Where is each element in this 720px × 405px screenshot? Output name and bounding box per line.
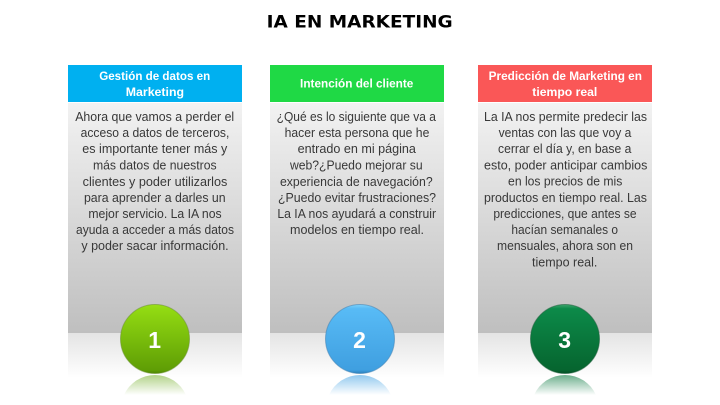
text block: ventas con las que voy a [499,126,631,140]
text block: cerrar el día y, en base a [498,142,631,156]
heading: Marketing [126,85,184,99]
icon: number 1 badge: 1 [148,327,161,353]
icon: number 3 badge: 3 [558,327,571,353]
text block: La IA nos ayudará a construir [277,207,436,221]
text block: tiempo real. [532,256,597,270]
text block: predicciones, que antes se [493,207,637,221]
text block: ayuda a acceder a más datos [76,223,234,237]
text block: hacer esta persona que he [285,126,429,140]
icon: number 1 badge [120,304,190,395]
text block: web?¿Puedo mejorar su [289,158,423,172]
text block: es importante tener más y [82,142,228,156]
heading: Gestión de datos en [99,69,210,83]
panel: Intención del cliente [270,65,444,395]
icon: number 2 badge: 2 [353,327,366,353]
text block: y poder sacar información. [81,239,229,253]
text block: La IA nos permite predecir las [484,110,647,124]
panel: Gestión de datos en Marketing [68,65,242,395]
text block: esto, poder anticipar cambios [484,158,647,172]
title: IA EN MARKETING [267,12,453,32]
panel background [270,103,444,333]
text block: clientes y poder utilizarlos [83,175,227,189]
text block: en los precios de mis [508,174,622,188]
heading [270,65,444,102]
text block [75,110,234,253]
text block: para aprender a darles un [84,191,226,205]
text block: más datos de nuestros [93,158,217,172]
heading: Intención del cliente [300,76,414,90]
panel background [68,103,242,333]
floor reflection [270,333,444,378]
heading [478,65,652,102]
heading [68,65,242,102]
text block: acceso a datos de terceros, [81,126,229,140]
text block: experiencia de navegación? [280,175,433,189]
text block: ¿Qué es lo siguiente que va a [277,110,436,124]
text block: ¿Puedo evitar frustraciones? [278,191,436,205]
icon: number 3 badge [530,304,600,395]
text block: mensuales, ahora son en [497,239,633,253]
panel background [478,103,652,333]
text block [277,110,436,237]
panel: Predicción de Marketing en tiempo real [478,65,652,395]
text block [484,110,647,270]
text block: hacían semanales o [511,223,618,237]
text block: mejor servicio. La IA nos [88,207,222,221]
text block: Ahora que vamos a perder el [75,110,234,124]
heading: Predicción de Marketing en [489,69,642,83]
icon: number 2 badge [326,304,394,395]
floor reflection [478,333,652,378]
text block: productos en tiempo real. Las [484,191,647,205]
text block: entrado en mi página [298,142,416,156]
floor reflection [68,333,242,378]
heading: tiempo real [532,85,597,99]
text block: modelos en tiempo real. [290,223,424,237]
